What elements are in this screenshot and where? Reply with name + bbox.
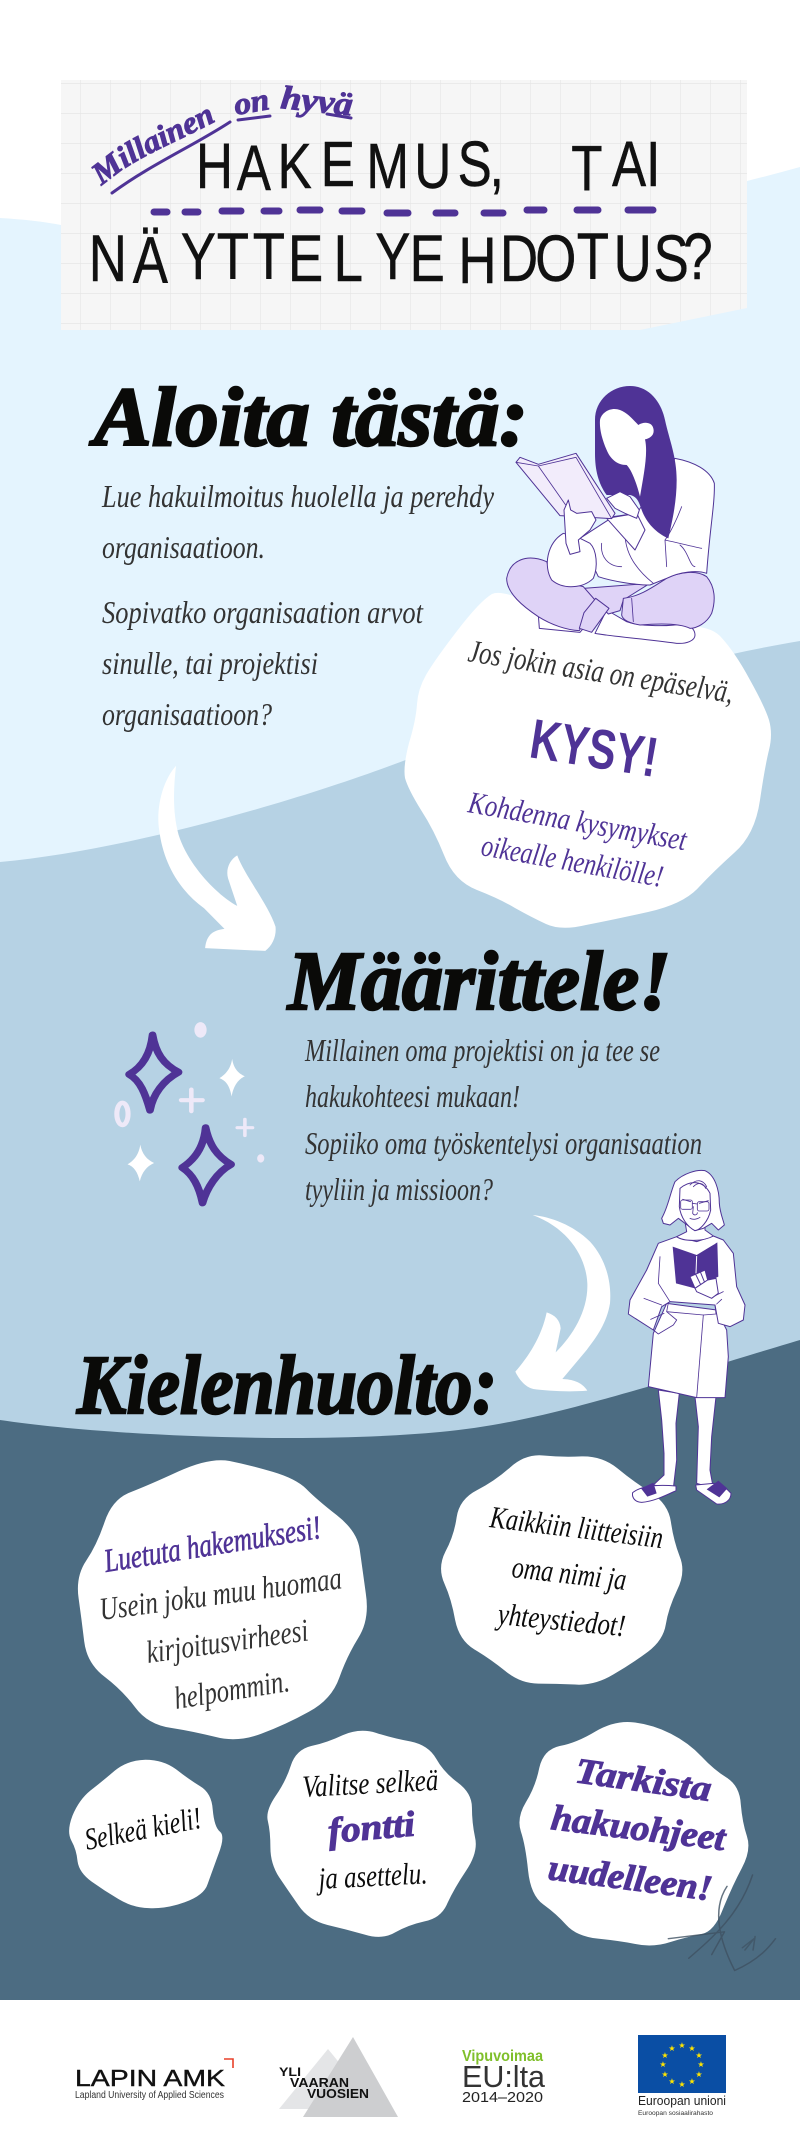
callout blob: ask: KYSY! xyxy=(526,707,662,789)
background: dark blue wave xyxy=(0,1340,800,2154)
logo: Lapin AMK xyxy=(75,2059,233,2101)
blob: proofreading: Luetuta hakemuksesi! xyxy=(101,1510,324,1580)
heading: Kielenhuolto: Kielenhuolto: xyxy=(76,1339,497,1432)
text block: define xyxy=(304,1032,702,1207)
heading: Määrittele: Määrittele! xyxy=(286,935,671,1028)
logo: Vipuvoimaa EU:lta: 2014–2020 xyxy=(462,2090,543,2106)
illustration: woman reading xyxy=(507,386,714,643)
logo: European Union flag: ★ xyxy=(668,2044,676,2053)
logo: European Union flag: ★ xyxy=(688,2077,696,2086)
callout blob: ask: oikealle henkilölle! xyxy=(479,827,666,894)
title: purple script line: on xyxy=(231,81,272,122)
arrow: to Kielenhuolto xyxy=(515,1215,610,1391)
blob: clear language xyxy=(69,1760,222,1908)
text block: define: Millainen oma projektisi on ja tee se xyxy=(304,1032,660,1068)
logo: European Union flag: Euroopan sosiaalirahasto xyxy=(638,2110,713,2117)
logo: European Union flag: Euroopan unioni xyxy=(638,2093,726,2108)
blob: clear language: Selkeä kieli! xyxy=(82,1800,204,1857)
background: mid blue wave xyxy=(0,641,800,2154)
speech blobs xyxy=(69,1455,748,1946)
blob: proofreading: kirjoitusvirheesi xyxy=(144,1612,310,1670)
arrow: to Määrittele xyxy=(158,766,276,951)
blob: check instructions: hakuohjeet xyxy=(549,1797,729,1858)
logo: European Union flag: ★ xyxy=(695,2070,703,2079)
text block: define: tyyliin ja missioon? xyxy=(305,1171,493,1207)
logo: Yli vaaran vuosien xyxy=(279,2037,398,2117)
title panel: graph paper xyxy=(61,80,747,330)
blob: attachments xyxy=(441,1455,682,1685)
logo: Vipuvoimaa EU:lta xyxy=(462,2048,546,2106)
logo: Vipuvoimaa EU:lta: EU:lta xyxy=(462,2059,546,2094)
title: dashed purple divider xyxy=(154,210,653,213)
title: purple script line: hyvä xyxy=(279,80,355,123)
blob: check instructions: Tarkista xyxy=(573,1750,714,1809)
logo: European Union flag: ★ xyxy=(697,2060,705,2069)
blob: proofreading: Usein joku muu huomaa xyxy=(97,1559,344,1627)
heading: Aloita tästä: Aloita tästä: xyxy=(89,371,528,464)
text block: intro: Lue hakuilmoitus huolella ja perehdy xyxy=(101,478,495,514)
text block: intro: organisaatioon? xyxy=(102,696,272,732)
title: main line one: HAKEMUS, TAI xyxy=(196,128,660,204)
title: purple script line: Millainen xyxy=(91,109,216,186)
logo: Yli vaaran vuosien: YLI xyxy=(279,2065,301,2079)
logo: Lapin AMK: Lapland University of Applied Sciences xyxy=(75,2090,224,2101)
blob: attachments: yhteystiedot! xyxy=(494,1596,627,1643)
blob: check instructions xyxy=(519,1722,748,1946)
text block: intro: organisaatioon. xyxy=(102,529,265,565)
blob: attachments: oma nimi ja xyxy=(510,1549,628,1597)
logo: European Union flag: ★ xyxy=(659,2060,667,2069)
blob: proofreading: helpommin. xyxy=(171,1662,292,1716)
logo: European Union flag xyxy=(638,2035,726,2117)
logo: European Union flag: ★ xyxy=(678,2080,686,2089)
blob: font: Valitse selkeä xyxy=(302,1762,439,1804)
callout blob: ask xyxy=(404,593,771,928)
text block: intro: Sopivatko organisaation arvot xyxy=(102,594,424,630)
logo: European Union flag: ★ xyxy=(661,2070,669,2079)
title: purple script line xyxy=(91,80,355,195)
logo: European Union flag: ★ xyxy=(668,2077,676,2086)
logo: European Union flag: ★ xyxy=(688,2044,696,2053)
blob: attachments: Kaikkiin liitteisiin xyxy=(487,1499,665,1555)
blob: check instructions: uudelleen! xyxy=(546,1847,715,1908)
logo: Yli vaaran vuosien: VAARAN xyxy=(290,2075,349,2090)
title: main line two: NÄYTTELYEHDOTUS? xyxy=(89,219,713,297)
blob: font: ja asettelu. xyxy=(314,1855,428,1896)
icon: sparkles xyxy=(117,1022,264,1203)
blob: proofreading xyxy=(78,1460,367,1739)
logo: Lapin AMK: LAPIN AMK xyxy=(75,2065,225,2091)
text block: define: hakukohteesi mukaan! xyxy=(305,1078,520,1114)
logo: European Union flag: ★ xyxy=(695,2051,703,2060)
logo: European Union flag: ★ xyxy=(678,2041,686,2050)
text block: intro xyxy=(101,478,495,732)
callout blob: ask: Kohdenna kysymykset xyxy=(465,784,691,857)
blob: font: fontti xyxy=(326,1804,416,1851)
logo: Yli vaaran vuosien: VUOSIEN xyxy=(307,2086,369,2101)
illustration: woman with book xyxy=(628,1170,745,1504)
logo: Vipuvoimaa EU:lta: Vipuvoimaa xyxy=(462,2048,543,2065)
footer band xyxy=(0,2000,800,2154)
text block: intro: sinulle, tai projektisi xyxy=(102,645,318,681)
logo: European Union flag: ★ xyxy=(661,2051,669,2060)
blob: font xyxy=(267,1731,476,1937)
signature xyxy=(668,1875,776,1971)
